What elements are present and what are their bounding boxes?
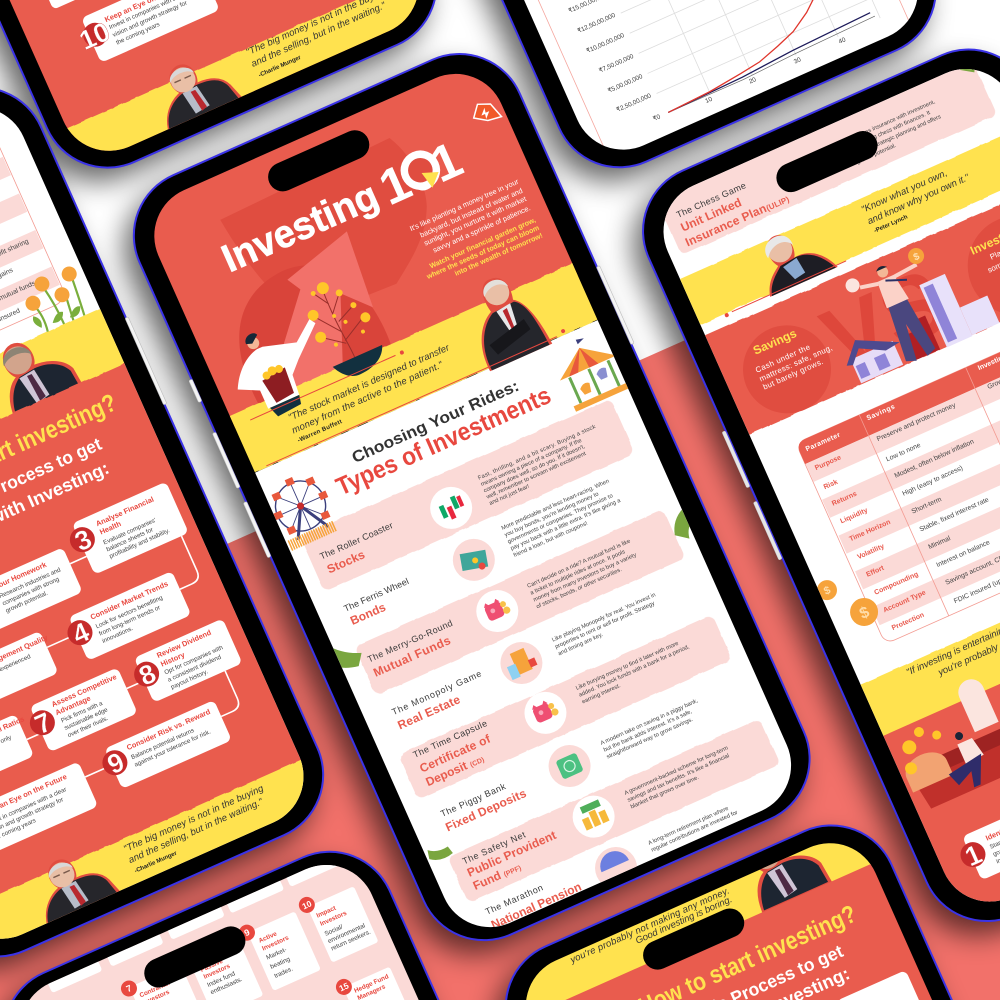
card 7 xyxy=(118,958,206,1000)
step 8: payout history. xyxy=(170,668,209,691)
card 10: environmental xyxy=(327,922,366,945)
phone: bottom-right, how to start investing xyxy=(481,795,1000,1000)
step 10 xyxy=(0,763,96,850)
intro highlight in yellow: Watch your financial garden grow, xyxy=(428,216,537,270)
row: fixed deposits: straightforward way to grow savings. xyxy=(606,717,694,760)
comparison table: Preserve and protect money xyxy=(876,402,957,443)
step 7: over their rivals. xyxy=(67,715,110,739)
row: bonds: More predictable and less heart-racing. When xyxy=(501,479,610,532)
line chart with axis labels: ₹5,00,00,000 xyxy=(607,73,644,95)
step 9: Balance potential returns xyxy=(130,727,195,761)
icon: coin flowers xyxy=(25,266,86,332)
card 9: Investors xyxy=(261,934,290,952)
intro paragraph: It's like planting a money tree in your xyxy=(408,177,520,233)
card 10: Social/ xyxy=(324,924,344,938)
line chart with axis labels: ₹12,50,00,000 xyxy=(576,12,617,35)
quote: Charlie Munger: "The big money is not in the buying xyxy=(122,783,266,855)
step 9: against your tolerance for risk. xyxy=(133,728,212,769)
step 2: companies with strong xyxy=(1,576,61,607)
row: bonds xyxy=(339,477,625,631)
comparison table: Stable, fixed interest rate xyxy=(919,496,990,533)
notch: bottom-right xyxy=(638,904,749,974)
portrait: Warren Buffett xyxy=(482,278,552,372)
row: fixed deposits: Fixed Deposits xyxy=(443,786,529,834)
row: mutual funds: of stocks, bonds, or other securities. xyxy=(536,567,623,610)
step 8: a consistent dividend xyxy=(167,654,223,684)
intro paragraph: savvy and a sprinkle of patience. xyxy=(431,203,532,255)
step 3: profitability and stability. xyxy=(108,527,171,560)
row: public provident fund: Fund (PPF) xyxy=(471,859,523,893)
icon: umbrella xyxy=(595,846,629,872)
icon: green safe xyxy=(555,752,584,780)
icon: money bill xyxy=(953,43,987,77)
comparison table: Minimal xyxy=(927,535,952,551)
row: fixed deposits: A modern take on saving in a piggy bank, xyxy=(600,698,699,747)
comparison table: Parameter xyxy=(805,432,842,453)
comparison table: Purpose xyxy=(814,454,842,472)
intro highlight in yellow: where the seeds of today can bloom xyxy=(425,224,540,281)
card 9: 9 xyxy=(243,927,251,938)
row: certificate of deposit: Certificate of xyxy=(417,731,493,775)
card 7: Contrarian xyxy=(139,980,171,999)
comparison table end xyxy=(0,147,62,330)
row: stocks xyxy=(316,424,608,579)
savings text: but barely grows. xyxy=(762,357,825,392)
title: Investing 101 xyxy=(220,144,465,272)
step 3: 3 xyxy=(70,524,96,557)
step 5 xyxy=(0,632,57,699)
quote: Warren Buffett: money from the active to the patient." xyxy=(290,359,445,436)
row: stocks: and not just fear! xyxy=(489,484,531,507)
portrait: Peter Lynch xyxy=(748,218,838,297)
step 8: 8 xyxy=(135,658,160,692)
card 8: Passive xyxy=(200,958,225,974)
step 2 xyxy=(0,547,83,634)
card 9: beating xyxy=(269,956,292,971)
quote: Peter Lynch: "Know what you own, xyxy=(860,168,949,216)
line chart with axis labels: 40 xyxy=(838,36,847,46)
row: public provident fund: The Safety Net xyxy=(461,829,527,866)
comparison table xyxy=(796,300,1000,644)
icon: piggy bank xyxy=(531,697,560,724)
card 9 xyxy=(236,904,321,994)
logo icon xyxy=(472,103,503,122)
icon: man holding coin bucket xyxy=(238,319,316,416)
process card xyxy=(836,970,926,1000)
comparison table: Effort xyxy=(865,564,886,579)
row: national pension xyxy=(484,798,742,932)
quote: Peter Lynch xyxy=(860,160,975,236)
savings text xyxy=(745,315,837,392)
comparison table: High (easy to access) xyxy=(902,465,964,498)
heading: choosing your rides: Types of Investments xyxy=(332,381,555,501)
step 9 xyxy=(102,702,230,788)
ULIP row band: like playing chess with finances. It xyxy=(849,110,932,151)
title: Investing 101: Investing xyxy=(216,174,385,281)
row: national pension: National Pension xyxy=(489,880,583,932)
comparison table: Liquidity xyxy=(839,507,869,525)
comparison table: Returns xyxy=(831,491,858,508)
card 15: 15 xyxy=(338,980,351,993)
row: stocks: company does well, so do you. If it doesn't, xyxy=(483,444,587,494)
row: bonds: Bonds xyxy=(348,600,388,628)
ULIP row band: Combines insurance with investment, xyxy=(846,99,937,144)
portrait: George Soros xyxy=(2,342,82,413)
portrait: George Soros xyxy=(736,821,830,911)
comparison table: Account Type xyxy=(882,589,927,614)
icon: carousel xyxy=(547,327,631,413)
ULIP row band xyxy=(647,38,997,255)
icon: money bills xyxy=(314,479,779,871)
quote: Charlie Munger: -Charlie Munger xyxy=(258,55,303,79)
card 8: enthusiasts. xyxy=(209,976,244,996)
phone: right, ULIP, savings vs investing table xyxy=(615,22,1000,944)
row: mutual funds: money from many investors to buy a variety xyxy=(533,552,638,603)
comparison table: Protection xyxy=(891,612,925,632)
icon: city buildings xyxy=(502,645,539,680)
card 8 xyxy=(188,937,263,1000)
icon: candlesticks xyxy=(437,493,467,522)
intro highlight in yellow: into the wealth of tomorrow! xyxy=(454,232,544,278)
row: public provident fund: savings and tax benefits. It's like a financial xyxy=(627,753,730,804)
illustration: city skyline xyxy=(889,262,1000,361)
step 7: Assess Competitive xyxy=(50,672,118,709)
step 8: Review Dividend xyxy=(155,628,213,660)
step 3: Evaluate companies' xyxy=(102,517,157,546)
row: certificate of deposit xyxy=(411,630,699,789)
card 8: Investors xyxy=(203,963,232,981)
yellow quote band xyxy=(851,526,1000,741)
ULIP row band: The Chess Game xyxy=(675,180,747,220)
card 9: trades. xyxy=(273,965,294,980)
step 6 xyxy=(0,716,32,772)
row: fixed deposits: The Piggy Bank xyxy=(439,781,508,819)
ULIP row band: growth potential. xyxy=(856,143,898,166)
phone: bottom-left, investor types cards xyxy=(0,831,693,1000)
pink row bands xyxy=(300,396,780,905)
row: fixed deposits: but the bank adds interest. It's a safe, xyxy=(603,709,694,754)
line chart with axis labels: ₹2,50,00,000 xyxy=(615,92,653,114)
comparison table: Savings xyxy=(866,404,896,422)
row: national pension: A long-term retirement plan where xyxy=(647,806,730,847)
step 7: Pick firms with a xyxy=(60,700,104,725)
comparison table: Risk xyxy=(823,479,839,491)
line chart with axis labels: 10 xyxy=(704,96,714,105)
card 7: 7 xyxy=(125,983,133,994)
row: mutual funds: The Merry-Go-Round xyxy=(366,618,454,664)
row: national pension: The Marathon xyxy=(484,882,544,917)
row: real estate: Like playing Monopoly for real. You invest in xyxy=(551,592,657,644)
yellow quote band xyxy=(230,263,598,472)
investing text xyxy=(968,214,1000,298)
row: real estate: The Monopoly Game xyxy=(390,669,483,717)
card 15 xyxy=(333,959,414,1000)
title: Investing 101: 101 xyxy=(371,131,470,216)
comparison table: Interest on balance xyxy=(935,539,991,569)
portrait: Charlie Munger xyxy=(167,64,242,130)
row: real estate: and timing are key. xyxy=(557,632,605,657)
card 15: Hedge Fund xyxy=(353,973,390,995)
step 3: Analyse Financial xyxy=(94,495,155,528)
savings text: Savings xyxy=(751,326,799,358)
card 9: Market- xyxy=(265,946,288,962)
row: certificate of deposit: earning interest. xyxy=(581,683,622,705)
heading: choosing your rides: Choosing Your Rides: xyxy=(350,378,522,467)
phone: main, Investing 101 xyxy=(132,53,811,942)
row: stocks: Fast, thrilling, and a bit scary. Buying a stock xyxy=(477,424,597,482)
quote: Peter Lynch: -Peter Lynch xyxy=(873,214,909,235)
row: public provident fund: A government-backed scheme for long-term xyxy=(624,745,729,797)
illustration: house xyxy=(839,324,909,386)
ULIP row band: Insurance Plan(ULIP) xyxy=(683,191,791,249)
icon: money tree in bowl xyxy=(308,282,382,376)
row: public provident fund: blanket that grows over time. xyxy=(630,775,700,810)
row: certificate of deposit: Deposit (CD) xyxy=(424,751,486,789)
notch: bottom-left xyxy=(140,922,250,992)
row: real estate: Real Estate xyxy=(395,692,463,732)
hero dark circle xyxy=(239,266,391,404)
row: national pension: regular contributions are invested for xyxy=(650,810,739,854)
row: certificate of deposit: Like burying money to find it later with more xyxy=(575,641,680,692)
process step 10 card xyxy=(80,0,218,61)
intro paragraph: backyard, but instead of water and xyxy=(418,186,524,240)
step 4: innovations. xyxy=(101,625,134,645)
heading: how to start investing xyxy=(0,394,114,521)
icon: large coin: $ xyxy=(857,604,872,623)
icon: large coin xyxy=(846,593,883,630)
phone: left, table end and how to start investing process xyxy=(0,90,324,958)
row: stocks: means owning a piece of a company. If the xyxy=(480,438,583,488)
ULIP row band: Unit Linked xyxy=(679,195,744,234)
row: certificate of deposit: The Time Capsule xyxy=(411,718,489,760)
card 8: Index fund xyxy=(206,970,237,989)
comparison table: Volatility xyxy=(856,543,886,561)
step 9: 9 xyxy=(103,747,129,780)
step 8: Opt for companies with xyxy=(163,644,225,676)
row: bonds: friend a loan, but with coupons! xyxy=(513,521,589,559)
line chart with axis labels: ₹0 xyxy=(652,113,662,123)
step 7: 7 xyxy=(30,707,56,740)
savings text: Cash under the xyxy=(754,342,812,375)
process step 10 card: vision and growth strategy for xyxy=(112,0,188,39)
row: stocks: well, remember to scream with excitement xyxy=(485,451,587,501)
quote: Charlie Munger: and the selling, but in the waiting." xyxy=(250,0,388,70)
row: real estate xyxy=(390,591,664,732)
large VS letters: VS xyxy=(808,250,962,393)
row: stocks: The Roller Coaster xyxy=(318,520,394,561)
row circles xyxy=(423,478,644,898)
icon: coin xyxy=(814,577,840,603)
row: fixed deposits xyxy=(438,695,707,834)
row: certificate of deposit: added. You lock funds with a bank for a period, xyxy=(578,644,691,699)
step 9: Consider Risk vs. Reward xyxy=(125,707,212,752)
phone: top-right, growth chart xyxy=(501,0,936,168)
line chart with axis labels xyxy=(568,0,880,120)
quote: Charlie Munger: -Charlie Munger xyxy=(134,850,179,875)
icon: coin stacks xyxy=(577,799,610,831)
step 3: Health xyxy=(98,519,123,536)
process connector lines xyxy=(26,536,240,778)
ULIP row band: requires strategic planning and offers xyxy=(853,114,942,158)
quote: investing is boring: you're probably not making any money. xyxy=(568,885,731,966)
comparison table: Time Horizon xyxy=(848,519,892,543)
comparison table: Short-term xyxy=(911,496,943,516)
savings circle xyxy=(729,311,845,427)
step 4: Consider Market Trends xyxy=(89,579,170,622)
quote: investing is boring: Good investing is boring. xyxy=(634,894,734,947)
savings text: mattress: safe, snug, xyxy=(758,343,834,383)
card 10: 10 xyxy=(300,898,313,911)
comparison table: Modest, often below inflation xyxy=(894,438,975,480)
card 10: Investors xyxy=(319,910,348,928)
process step 1 xyxy=(953,793,1000,884)
card 10: return seekers. xyxy=(330,929,372,952)
row: bonds: governments or companies. They promise to xyxy=(507,493,614,545)
quote: Charlie Munger: and the selling, but in the waiting." xyxy=(127,796,265,866)
step 4: from long-term trends or xyxy=(98,604,161,638)
intro paragraph xyxy=(410,180,530,252)
step 7: Advantage xyxy=(54,694,92,717)
row: real estate: properties to rent or sell for profit. Strategy xyxy=(554,601,656,650)
icon: ferris wheel xyxy=(272,476,337,551)
row: mutual funds xyxy=(366,538,641,682)
step 8: History xyxy=(159,650,187,669)
illustration: woman on sofa with coins xyxy=(880,658,1000,813)
step 4: 4 xyxy=(68,617,94,650)
card 9: Active xyxy=(258,930,278,945)
white tabs from previous row xyxy=(45,847,343,993)
icon: bond certificate xyxy=(456,544,492,577)
row: stocks: Stocks xyxy=(325,547,367,576)
comparison table: Compounding xyxy=(873,571,920,597)
quote decoration line xyxy=(250,355,395,420)
comparison table: Low to none xyxy=(885,442,922,463)
hero arrow xyxy=(284,232,373,386)
row: public provident fund xyxy=(461,740,740,893)
row: mutual funds: a ticket to multiple rides at once. It pools xyxy=(530,549,626,597)
step 2: growth potential. xyxy=(5,590,49,615)
row: bonds: you buy bonds, you're lending money to xyxy=(504,491,600,539)
icon: coin: $ xyxy=(822,584,833,598)
phone: top-left, bottom of process page with Munger quote xyxy=(0,0,436,169)
process step 1: 1 xyxy=(960,839,986,872)
line chart with axis labels: ₹10,00,00,000 xyxy=(585,32,626,55)
line chart with axis labels: 30 xyxy=(793,56,803,66)
intro paragraph: sunlight, you nurture it with market xyxy=(423,194,528,248)
notch: right xyxy=(772,126,882,197)
card 10 xyxy=(296,877,379,966)
line chart with axis labels: 20 xyxy=(748,76,758,85)
investing circle xyxy=(952,199,1000,332)
process step 10 card: the coming years xyxy=(115,21,161,47)
process step 10 card: 10 xyxy=(75,16,114,56)
card 10: Impact xyxy=(315,904,338,920)
background: salmon diagonal field xyxy=(0,200,1000,1000)
quote: Warren Buffett: -Warren Buffett xyxy=(297,419,343,444)
row: bonds: pay you back with a little extra. It's like giving a xyxy=(510,498,622,552)
row: bonds: The Ferris Wheel xyxy=(342,576,410,614)
step 7: sustainable edge xyxy=(63,706,109,732)
step 3 xyxy=(70,484,187,573)
illustration: person balancing piggy and coin: $ xyxy=(912,251,922,264)
hero background blob xyxy=(220,138,426,294)
illustration: person balancing piggy and coin xyxy=(842,245,962,375)
step 3: balance sheets for xyxy=(105,526,154,553)
line chart with axis labels: ₹7,50,00,000 xyxy=(598,53,635,75)
quote: Warren Buffett: "The stock market is designed to transfer xyxy=(287,342,452,424)
row: public provident fund: Public Provident xyxy=(465,828,558,880)
step 4: Look for sectors benefiting xyxy=(95,594,164,630)
row: mutual funds: Mutual Funds xyxy=(371,633,453,680)
row: mutual funds: Can't decide on a ride? A mutual fund is like xyxy=(527,539,632,590)
portrait: Charlie Munger xyxy=(46,860,120,924)
step 4 xyxy=(68,572,190,659)
savings vs investing banner xyxy=(695,177,1000,439)
quote: Peter Lynch: and know why you own it." xyxy=(866,172,971,227)
notch: main xyxy=(263,126,374,196)
icon: piggy bank xyxy=(482,595,512,622)
step 7 xyxy=(30,669,136,750)
step 8 xyxy=(134,620,241,701)
